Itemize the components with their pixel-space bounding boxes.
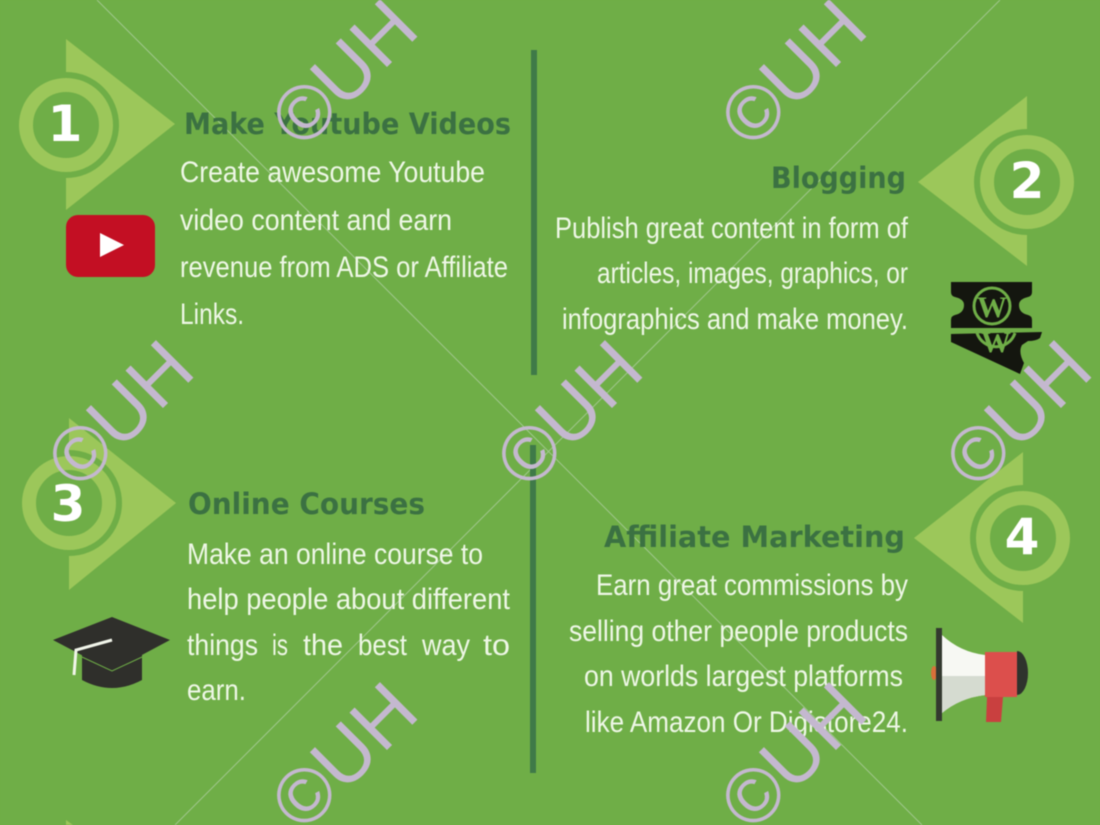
body text: help people about different <box>187 583 511 616</box>
divider: top <box>531 50 537 375</box>
badge 2 <box>918 96 1080 266</box>
panel: step 4 Affiliate Marketing <box>569 452 1076 739</box>
heading: Online Courses <box>188 487 425 521</box>
body text: Earn great commissions by <box>596 569 908 602</box>
watermark: middle centre: ©UH <box>479 324 659 504</box>
panel: step 1 YouTube <box>13 39 511 331</box>
body text: the <box>303 629 343 662</box>
body text <box>187 538 511 707</box>
body text: on worlds largest platforms <box>584 660 903 693</box>
icon: megaphone <box>931 628 1028 722</box>
badge 1 <box>13 39 175 210</box>
body text: Links. <box>180 298 244 331</box>
body text: Make an online course to <box>187 538 483 571</box>
body text: Create awesome Youtube <box>180 156 485 189</box>
body text: video content and earn <box>180 204 452 237</box>
body text: to <box>483 629 510 662</box>
body text: infographics and make money. <box>562 303 908 336</box>
body text: best <box>358 629 408 662</box>
heading: Blogging <box>771 161 906 195</box>
body text: articles, images, graphics, or <box>597 257 908 290</box>
icon: WordPress ticket <box>951 282 1042 374</box>
badge 4 <box>914 452 1076 623</box>
body text: earn. <box>187 674 246 707</box>
next badge tip <box>66 820 73 825</box>
body text <box>555 212 909 336</box>
body text: Publish great content in form of <box>555 212 909 245</box>
badge 3 <box>16 418 176 590</box>
body text: way <box>421 629 470 662</box>
heading: Make Youtube Videos <box>184 107 511 141</box>
badge 2: 2 <box>1010 152 1044 210</box>
watermark: middle left: ©UH <box>30 324 210 504</box>
icon: WordPress ticket: W <box>981 326 1011 359</box>
badge 1: 1 <box>48 95 82 153</box>
body text: is <box>272 629 288 662</box>
icon: YouTube <box>66 215 155 277</box>
badge 4: 4 <box>1005 508 1039 566</box>
body text <box>180 156 508 331</box>
divider: bottom <box>530 445 536 773</box>
badge 3: 3 <box>51 475 85 533</box>
body text: revenue from ADS or Affiliate <box>180 251 508 284</box>
body text: like Amazon Or Digistore24. <box>585 706 908 739</box>
icon: graduation cap <box>53 617 170 688</box>
panel: step 3 Online Courses <box>16 418 511 707</box>
panel: step 2 Blogging <box>555 96 1080 374</box>
heading: Affiliate Marketing <box>604 520 905 554</box>
icon: WordPress ticket: W <box>977 291 1007 324</box>
body text <box>569 569 908 739</box>
body text: selling other people products <box>569 615 908 648</box>
body text: things <box>187 629 258 662</box>
